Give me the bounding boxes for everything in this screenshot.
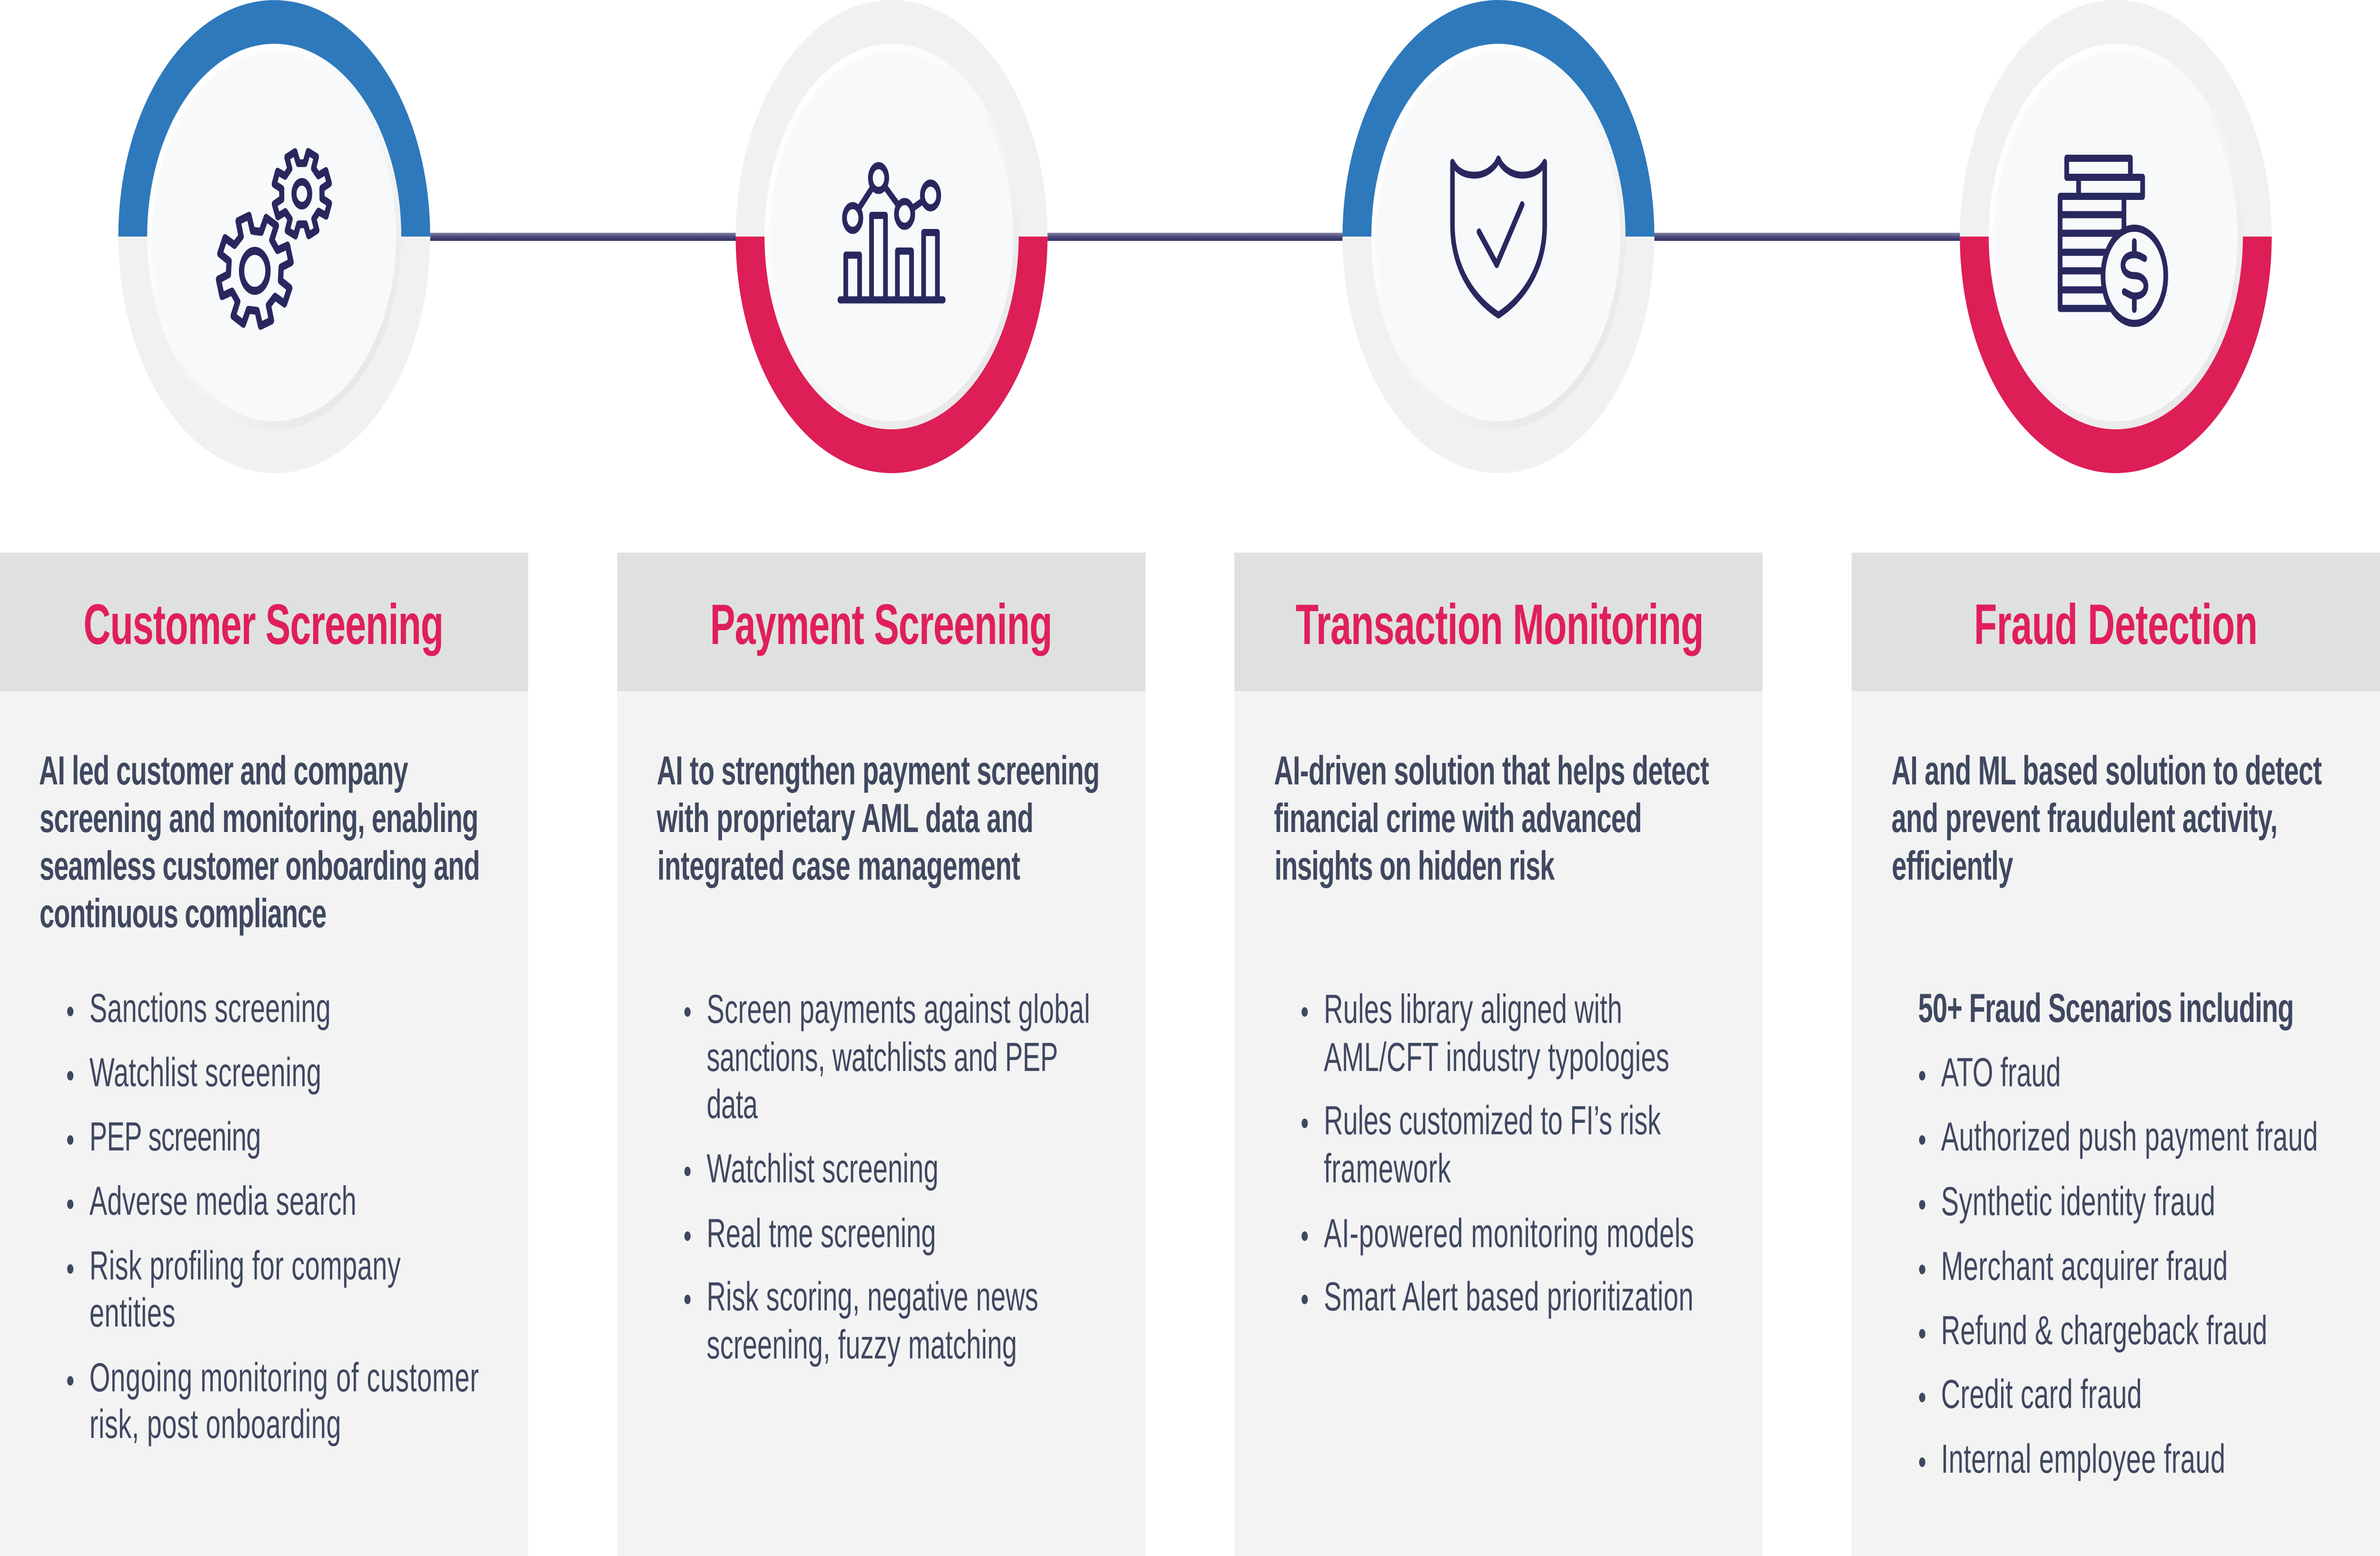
bullet list: Merchant acquirer fraud <box>1941 1244 2228 1289</box>
lead text: screening and monitoring, enabling <box>40 796 478 841</box>
heading: customer screening: Customer Screening <box>83 592 444 656</box>
lead text: with proprietary AML data and <box>656 796 1033 841</box>
bullet list <box>1301 987 1694 1319</box>
bullet list: Screen payments against global <box>707 987 1090 1032</box>
panel: payment screening <box>617 553 1146 1556</box>
bullet list: Risk profiling for company <box>89 1243 401 1288</box>
bullet list: Real tme screening <box>707 1211 936 1256</box>
bullet list: Sanctions screening <box>89 986 331 1031</box>
bullet list: Smart Alert based prioritization <box>1324 1274 1694 1319</box>
lead text: and prevent fraudulent activity, <box>1892 796 2278 841</box>
bullet list: Adverse media search <box>89 1179 357 1224</box>
connector: payment to transaction <box>1045 233 1346 241</box>
lead text: continuous compliance <box>40 891 327 936</box>
lead text: AI led customer and company <box>39 748 408 793</box>
lead text: integrated case management <box>657 843 1021 889</box>
lead text: financial crime with advanced <box>1274 796 1642 841</box>
bullet list: entities <box>89 1290 175 1336</box>
lead text <box>1892 748 2322 889</box>
connector: transaction to fraud <box>1650 233 1964 241</box>
lead text: AI-driven solution that helps detect <box>1274 748 1709 793</box>
connector: customer to payment <box>427 233 741 241</box>
bullet list: data <box>707 1082 758 1127</box>
bullet list: framework <box>1324 1146 1451 1191</box>
subheading: fraud scenarios: 50+ Fraud Scenarios including <box>1918 986 2294 1031</box>
bullet list <box>1919 1050 2318 1482</box>
lead text <box>656 748 1100 889</box>
bullet list: risk, post onboarding <box>89 1402 341 1447</box>
heading: payment screening: Payment Screening <box>710 592 1052 656</box>
bullet list: Authorized push payment fraud <box>1941 1114 2318 1160</box>
icon: bar and line chart <box>840 166 943 300</box>
icon: gears <box>206 139 338 345</box>
lead text: AI and ML based solution to detect <box>1892 748 2322 793</box>
bullet list: Rules library aligned with <box>1324 987 1622 1032</box>
bullet list: Internal employee fraud <box>1941 1437 2225 1482</box>
bullet list: ATO fraud <box>1941 1050 2061 1095</box>
lead text: AI to strengthen payment screening <box>657 748 1100 793</box>
lead text: efficiently <box>1892 843 2013 889</box>
bullet list: AML/CFT industry typologies <box>1324 1035 1669 1080</box>
badge: fraud detection <box>1960 0 2272 473</box>
bullet list: Risk scoring, negative news <box>707 1274 1038 1319</box>
panel: customer screening <box>0 553 528 1556</box>
lead text <box>1274 748 1709 889</box>
lead text: insights on hidden risk <box>1275 843 1555 889</box>
bullet list: Rules customized to FI’s risk <box>1324 1098 1661 1143</box>
badge: transaction monitoring <box>1342 0 1655 473</box>
heading: fraud detection: Fraud Detection <box>1974 592 2258 656</box>
bullet list <box>67 986 479 1447</box>
bullet list: PEP screening <box>89 1114 261 1160</box>
bullet list: Credit card fraud <box>1941 1372 2142 1417</box>
bullet list: Watchlist screening <box>707 1146 939 1191</box>
bullet list: Synthetic identity fraud <box>1941 1179 2215 1224</box>
panel: transaction monitoring <box>1234 553 1763 1556</box>
badge: payment screening <box>735 0 1048 473</box>
bullet list: sanctions, watchlists and PEP <box>707 1035 1058 1080</box>
bullet list: Watchlist screening <box>89 1050 321 1095</box>
lead text: seamless customer onboarding and <box>40 843 480 889</box>
bullet list: screening, fuzzy matching <box>707 1322 1017 1368</box>
icon: shield with check <box>1452 159 1545 315</box>
bullet list <box>684 987 1090 1368</box>
heading: transaction monitoring: Transaction Monitoring <box>1296 592 1704 656</box>
badge: customer screening <box>119 0 430 473</box>
bullet list: Ongoing monitoring of customer <box>89 1355 479 1400</box>
bullet list: Refund & chargeback fraud <box>1941 1308 2267 1353</box>
bullet list: AI-powered monitoring models <box>1324 1211 1694 1256</box>
panel: fraud detection <box>1852 553 2380 1556</box>
icon: coin stack with dollar <box>2060 158 2166 323</box>
lead text <box>39 748 480 936</box>
